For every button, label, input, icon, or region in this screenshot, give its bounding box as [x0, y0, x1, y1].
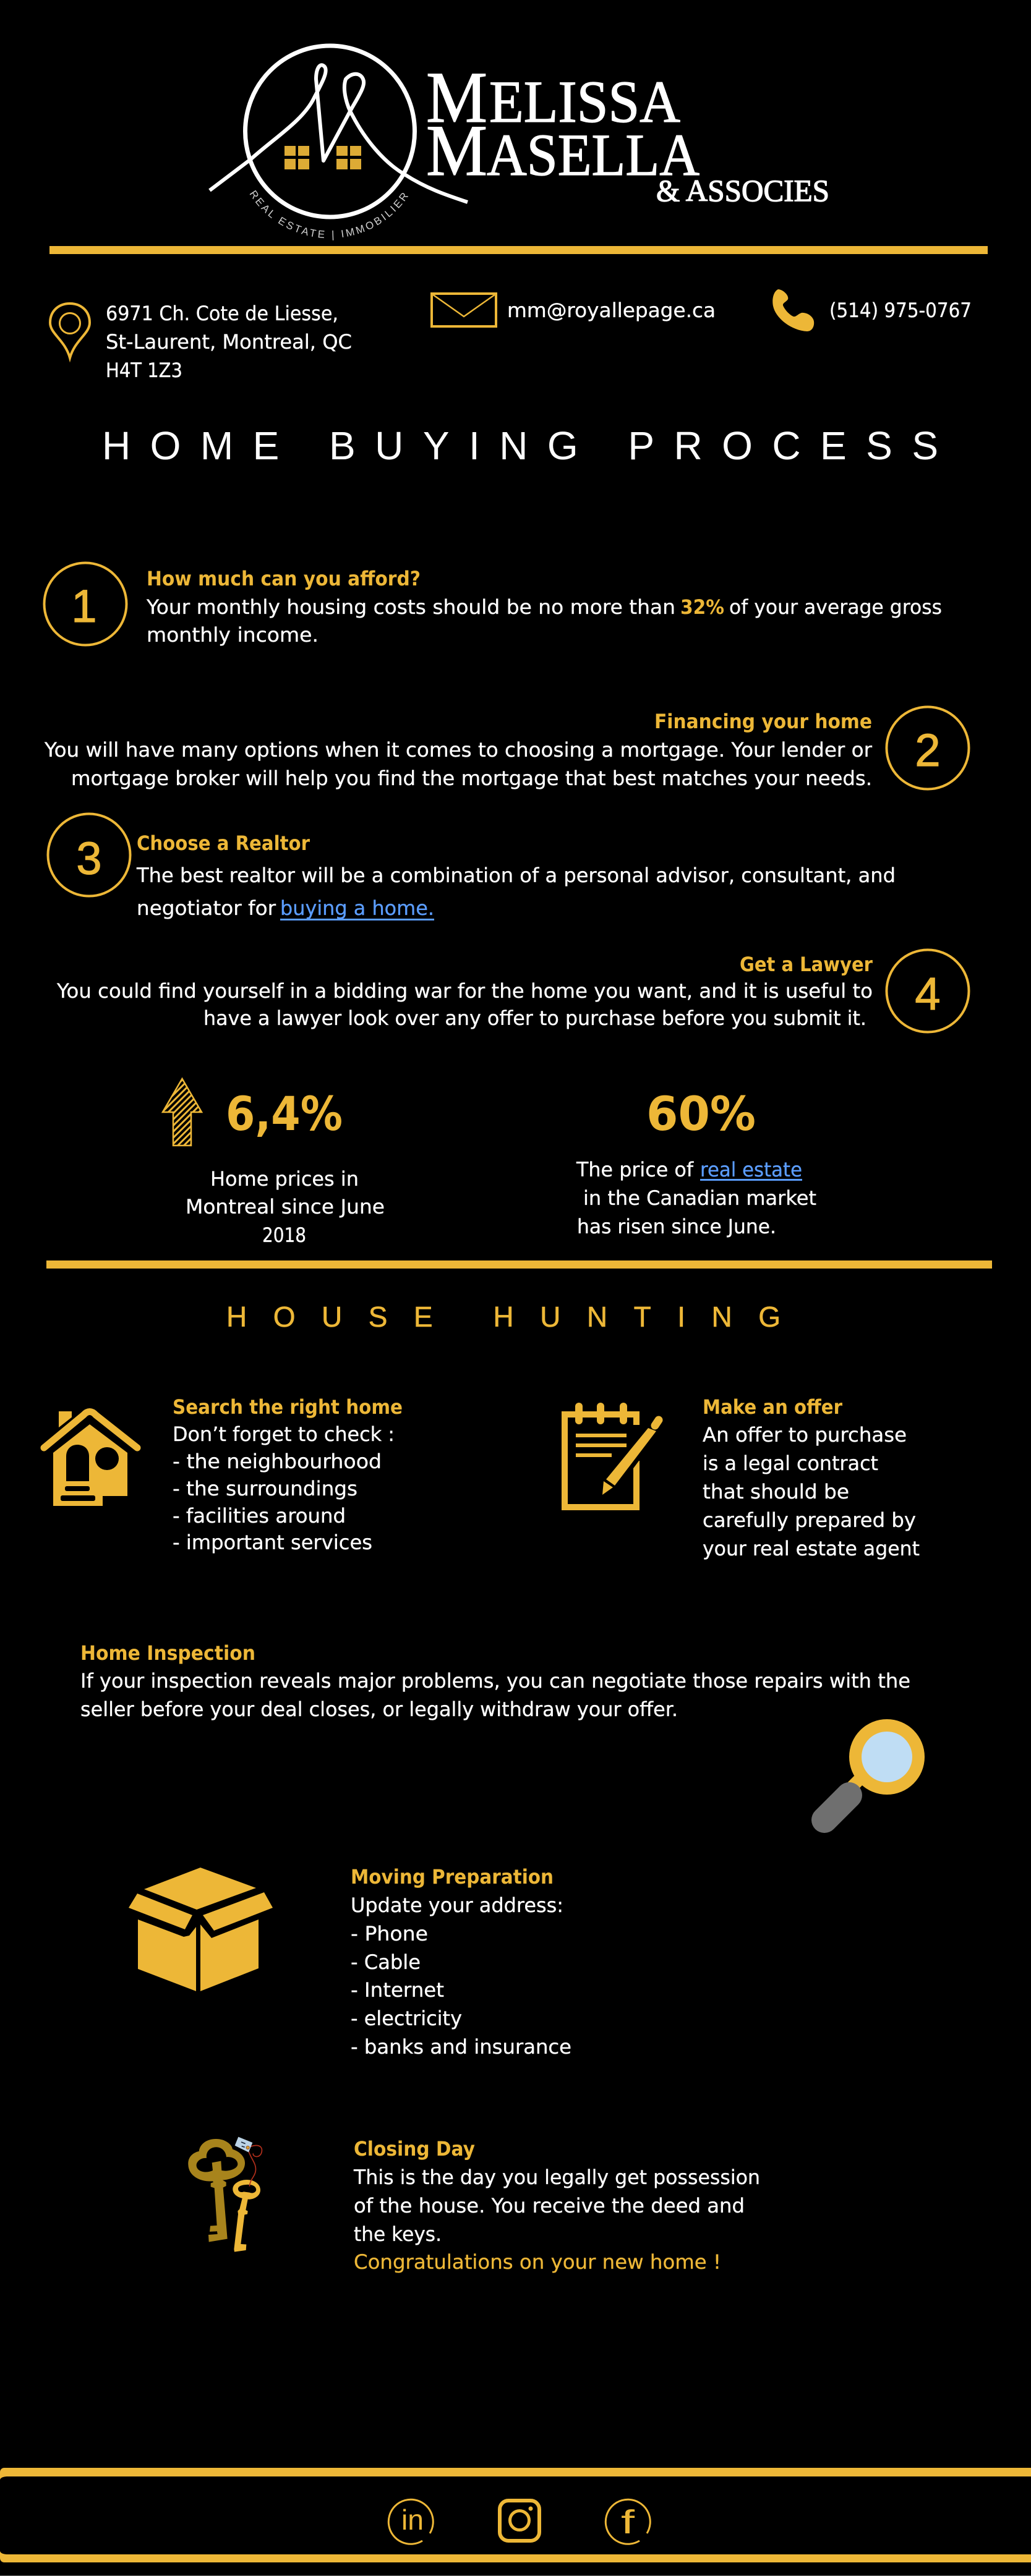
text block: moving list: - electricity: [351, 2007, 462, 2030]
icon: hatched up arrow: [163, 1079, 202, 1146]
text block: inspection: If your inspection reveals major problems, you can negotiate those repairs with the: [80, 1669, 910, 1693]
number badge 3: 3: [76, 833, 102, 884]
icon: phone: [772, 289, 814, 331]
text block: moving list: - Phone: [351, 1922, 428, 1945]
icon: instagram: [500, 2501, 539, 2541]
text block: step 1: of your average gross: [729, 595, 942, 619]
icon: facebook: f: [621, 2504, 635, 2541]
text block: step 2: mortgage broker will help you find the mortgage that best matches your needs.: [71, 767, 872, 790]
footer: [0, 2468, 1031, 2562]
stat caption: [576, 1158, 816, 1238]
stat caption: The price of: [576, 1158, 694, 1181]
heading: how much can you afford: How much can you afford?: [147, 567, 421, 590]
text block: closing: the keys.: [354, 2222, 442, 2246]
text block: closing: of the house. You receive the deed and: [354, 2194, 745, 2217]
stat number: 6,4%: [226, 1086, 343, 1141]
step 1: [45, 563, 942, 647]
text block: step 3: buying a home.: [280, 896, 434, 920]
text block: step 4: [56, 979, 873, 1030]
title: HOME BUYING PROCESS: [102, 423, 938, 468]
panel: make an offer: [565, 1395, 920, 1560]
stat: 6,4%: [163, 1079, 385, 1247]
text block: closing: This is the day you legally get possession: [353, 2166, 760, 2189]
stat caption: Montreal since June: [186, 1195, 385, 1218]
email text: mm@royallepage.ca: [507, 299, 716, 322]
address text: 6971 Ch. Cote de Liesse,: [106, 302, 338, 325]
stat caption: [186, 1167, 385, 1247]
text block: step 1: monthly income.: [147, 623, 319, 647]
icon: magnifying glass: [824, 1719, 925, 1820]
text block: step 2: You will have many options when it comes to choosing a mortgage. Your lender or: [44, 738, 873, 762]
number badge 1: [45, 563, 126, 645]
text block: step 4: have a lawyer look over any offer to purchase before you submit it.: [203, 1006, 866, 1030]
logo: [208, 43, 829, 240]
text block: closing: Congratulations on your new home !: [354, 2250, 721, 2274]
heading: home inspection: Home Inspection: [80, 1641, 255, 1665]
number badge 1: 1: [71, 580, 97, 632]
number badge 2: [887, 707, 969, 789]
icon: box: [129, 1868, 273, 1991]
text block: checklist: [173, 1422, 395, 1554]
address text: [106, 302, 352, 382]
contact: address: [50, 302, 352, 382]
text block: step 3: [136, 864, 896, 920]
text block: inspection: [80, 1669, 910, 1721]
logo emblem: [208, 43, 468, 240]
heading: make an offer: Make an offer: [703, 1395, 842, 1419]
heading: moving preparation: Moving Preparation: [351, 1865, 554, 1889]
phone text: (514) 975-0767: [829, 299, 972, 322]
text block: step 2: [44, 738, 873, 790]
text block: offer: that should be: [703, 1480, 849, 1503]
text block: offer: carefully prepared by: [703, 1508, 916, 1532]
stat number: 60%: [646, 1086, 756, 1141]
icon: envelope: [432, 294, 496, 326]
text block: moving list: - Internet: [351, 1978, 444, 2002]
text block: offer: [703, 1423, 920, 1560]
heading: get a lawyer: Get a Lawyer: [740, 953, 873, 976]
text block: checklist: - important services: [173, 1531, 372, 1554]
text block: offer: is a legal contract: [703, 1452, 878, 1475]
panel: closing day: [188, 2137, 760, 2274]
icon: house: [44, 1411, 137, 1506]
text block: step 4: You could find yourself in a bidding war for the home you want, and it is useful to: [56, 979, 873, 1003]
heading: closing day: Closing Day: [354, 2137, 475, 2161]
text block: step 1: 32%: [680, 595, 724, 619]
icon: keys: [188, 2137, 262, 2252]
icon: linkedin: in: [401, 2504, 424, 2536]
text block: offer: An offer to purchase: [703, 1423, 907, 1447]
heading: choose a realtor: Choose a Realtor: [137, 831, 310, 855]
logo wordmark: ELISSA: [489, 69, 680, 135]
text block: moving list: Update your address:: [351, 1894, 563, 1917]
stat caption: Home prices in: [210, 1167, 359, 1191]
icon: facebook: [605, 2499, 650, 2544]
stat caption: 2018: [262, 1223, 306, 1247]
step 3: [48, 814, 896, 920]
stat caption: has risen since June.: [577, 1215, 776, 1238]
stat caption: in the Canadian market: [583, 1186, 816, 1210]
panel: moving preparation: [129, 1865, 571, 2059]
stat caption: real estate: [700, 1158, 802, 1181]
text block: checklist: Don’t forget to check :: [173, 1422, 395, 1446]
text block: checklist: - the neighbourhood: [173, 1450, 382, 1473]
logo emblem: REAL ESTATE | IMMOBILIER: [250, 190, 408, 240]
number badge 4: [887, 950, 969, 1032]
contact: email: [432, 294, 716, 326]
panel: search the right home: [44, 1395, 403, 1554]
number badge 3: [48, 814, 130, 896]
text block: step 1: [146, 595, 942, 647]
number badge 2: 2: [915, 725, 941, 776]
icon: map pin: [50, 304, 90, 358]
number badge 4: 4: [915, 968, 941, 1019]
heading: search the right home: Search the right home: [173, 1395, 403, 1419]
logo wordmark: M: [426, 57, 487, 138]
footer frame: [0, 2468, 1031, 2562]
text block: moving list: [351, 1894, 571, 2059]
text block: offer: your real estate agent: [703, 1537, 920, 1560]
text block: checklist: - the surroundings: [173, 1477, 357, 1500]
text block: step 1: Your monthly housing costs should be no more than: [146, 595, 675, 619]
text block: moving list: - banks and insurance: [351, 2035, 571, 2059]
icon: linkedin: [388, 2499, 433, 2544]
text block: inspection: seller before your deal closes, or legally withdraw your offer.: [80, 1698, 678, 1721]
panel: home inspection: [80, 1641, 925, 1820]
text block: moving list: - Cable: [351, 1950, 421, 1974]
step 2: [44, 707, 969, 790]
logo wordmark: M: [426, 110, 487, 191]
stat: 60%: [576, 1086, 816, 1238]
text block: closing: [353, 2166, 760, 2274]
text block: step 3: The best realtor will be a combination of a personal advisor, consultant, and: [136, 864, 896, 887]
step 4: [56, 950, 969, 1032]
contact: phone: [772, 289, 972, 331]
heading: house hunting: HOUSE HUNTING: [226, 1301, 781, 1333]
address text: St-Laurent, Montreal, QC: [106, 330, 352, 354]
logo wordmark: & ASSOCIES: [656, 173, 829, 208]
text block: step 3: negotiator for: [137, 896, 276, 920]
address text: H4T 1Z3: [106, 359, 182, 382]
logo wordmark: ASELLA: [487, 122, 699, 188]
heading: financing your home: Financing your home: [654, 710, 872, 733]
text block: checklist: - facilities around: [173, 1504, 346, 1528]
icon: notepad and pencil: [565, 1403, 659, 1507]
logo wordmark: [426, 57, 829, 208]
